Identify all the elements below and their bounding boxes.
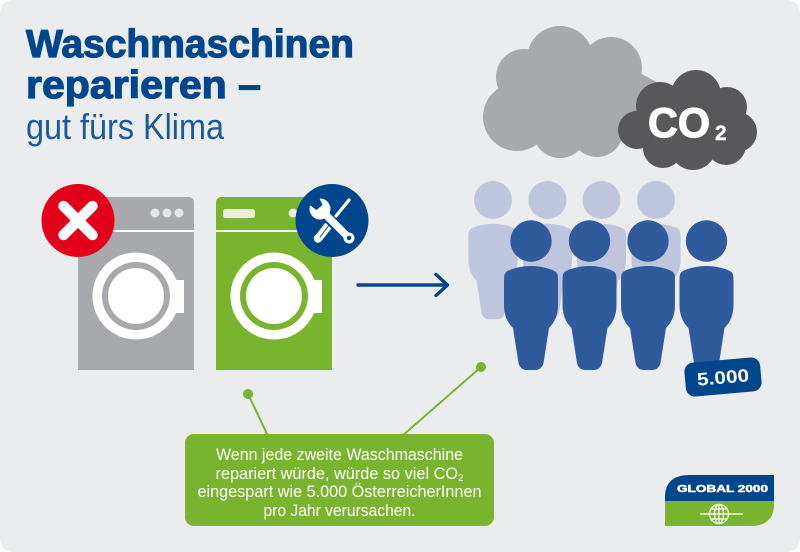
title: reparieren – <box>26 64 261 107</box>
icon: dark CO2 cloud <box>618 70 757 170</box>
title: Waschmaschinen <box>26 23 354 66</box>
arrow <box>358 274 448 296</box>
callout: Wenn jede zweite Waschmaschine <box>216 446 463 464</box>
callout: repariert würde, würde so viel CO <box>216 465 461 483</box>
callout: pro Jahr verursachen. <box>264 502 416 520</box>
label: 5.000: 5.000 <box>696 365 750 390</box>
icon: grey cloud <box>483 26 662 158</box>
title <box>26 23 354 147</box>
icon: green repaired washing machine <box>216 197 332 370</box>
label: 5.000 <box>684 357 762 397</box>
icon: red cross badge <box>42 184 114 257</box>
icon: tools badge <box>296 184 368 257</box>
icon: logo globe <box>700 504 743 524</box>
callout: eingespart wie 5.000 ÖsterreicherInnen <box>198 483 482 501</box>
people: dark front row <box>504 220 734 370</box>
callout: 2 <box>458 473 464 484</box>
people: light back row <box>468 181 681 319</box>
connector: people to callout <box>402 362 486 436</box>
icon: dark CO2 cloud: 2 <box>715 122 727 145</box>
title: gut fürs Klima <box>26 106 225 147</box>
icon: dark CO2 cloud: CO <box>648 99 710 146</box>
logo: GLOBAL 2000: GLOBAL 2000 <box>677 483 768 495</box>
logo: GLOBAL 2000 <box>665 475 774 526</box>
connector: washing machines to callout <box>243 389 268 436</box>
callout <box>185 434 494 526</box>
icon: grey broken washing machine <box>78 197 194 370</box>
